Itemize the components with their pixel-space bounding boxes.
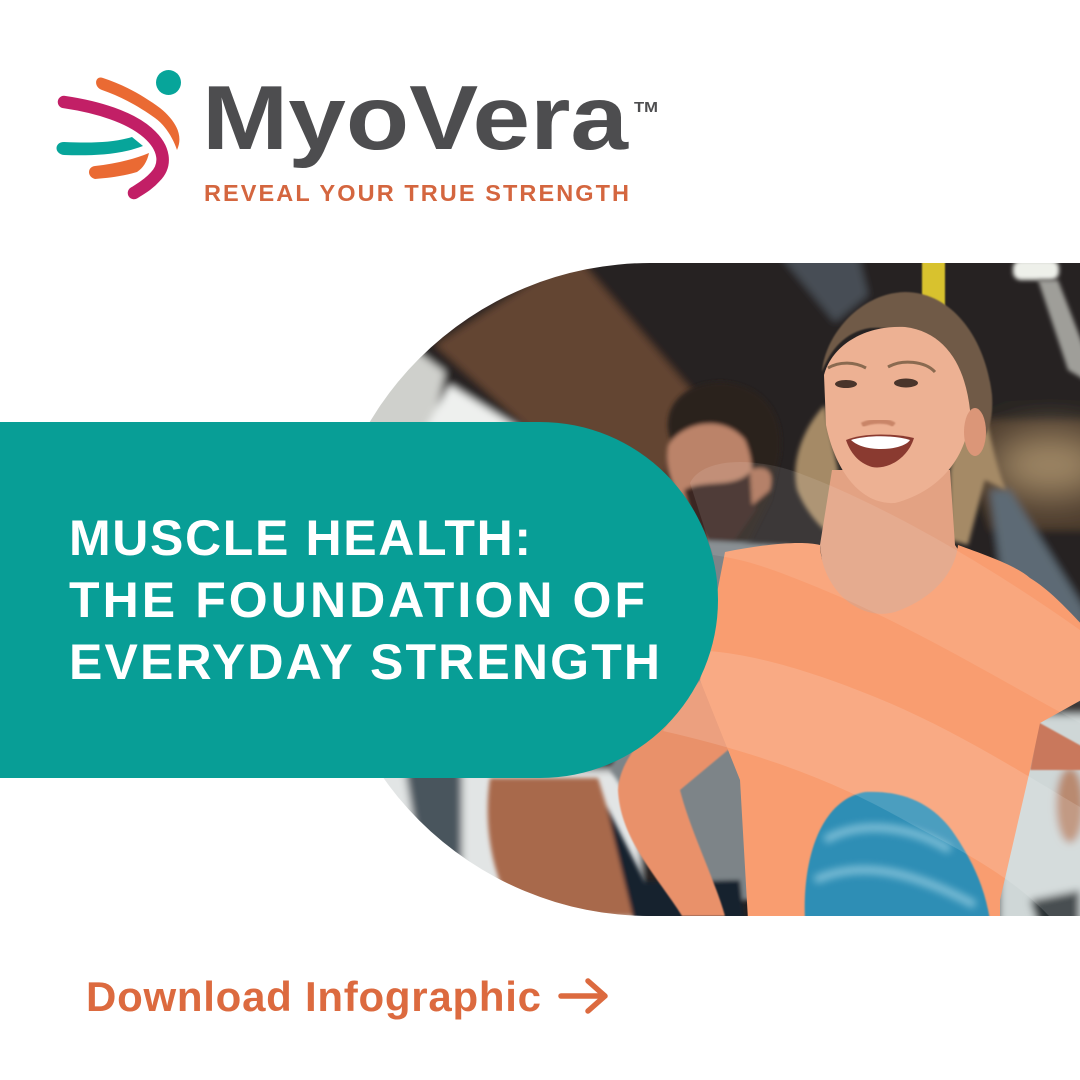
man <box>488 382 790 925</box>
teal title panel <box>0 422 718 778</box>
window <box>370 350 452 422</box>
woman's hair top <box>822 292 992 450</box>
download label: Download Infographic <box>86 973 541 1020</box>
woman's t-shirt <box>700 543 1080 920</box>
warm blurred light at right <box>980 416 1080 534</box>
logo icon <box>56 70 181 193</box>
arrow icon <box>561 981 605 1011</box>
ceiling lamp <box>1013 260 1059 280</box>
man's grey shirt <box>610 540 790 900</box>
right lower background <box>1000 715 1080 930</box>
lower left background <box>384 762 648 916</box>
background <box>370 263 1080 916</box>
woman's neck <box>820 470 965 617</box>
woman's smile <box>846 434 914 467</box>
woman's face <box>824 327 970 503</box>
trademark: TM <box>634 99 658 116</box>
yellow strap <box>922 260 945 308</box>
wordmark: MyoVera <box>202 68 630 169</box>
woman's loose hair <box>792 404 1006 548</box>
brown ceiling beam <box>435 255 695 480</box>
logo <box>56 68 658 206</box>
title: MUSCLE HEALTH: <box>69 510 531 566</box>
man's shorts <box>606 805 745 925</box>
title: THE FOUNDATION OF <box>69 572 645 628</box>
blue-grey column <box>990 490 1080 700</box>
man's arm <box>488 778 640 916</box>
woman's arm <box>618 680 740 916</box>
ear <box>964 408 986 456</box>
woman's nose <box>862 421 894 425</box>
woman <box>618 292 1080 920</box>
woman's eyes <box>835 380 857 388</box>
knee <box>805 792 990 920</box>
title: EVERYDAY STRENGTH <box>69 634 660 690</box>
man's head <box>666 388 774 544</box>
photo: gym scene <box>370 263 1080 916</box>
call to action <box>86 973 605 1020</box>
tagline: REVEAL YOUR TRUE STRENGTH <box>204 180 629 206</box>
title <box>69 510 660 690</box>
translucent ribbon bands <box>690 462 1080 723</box>
